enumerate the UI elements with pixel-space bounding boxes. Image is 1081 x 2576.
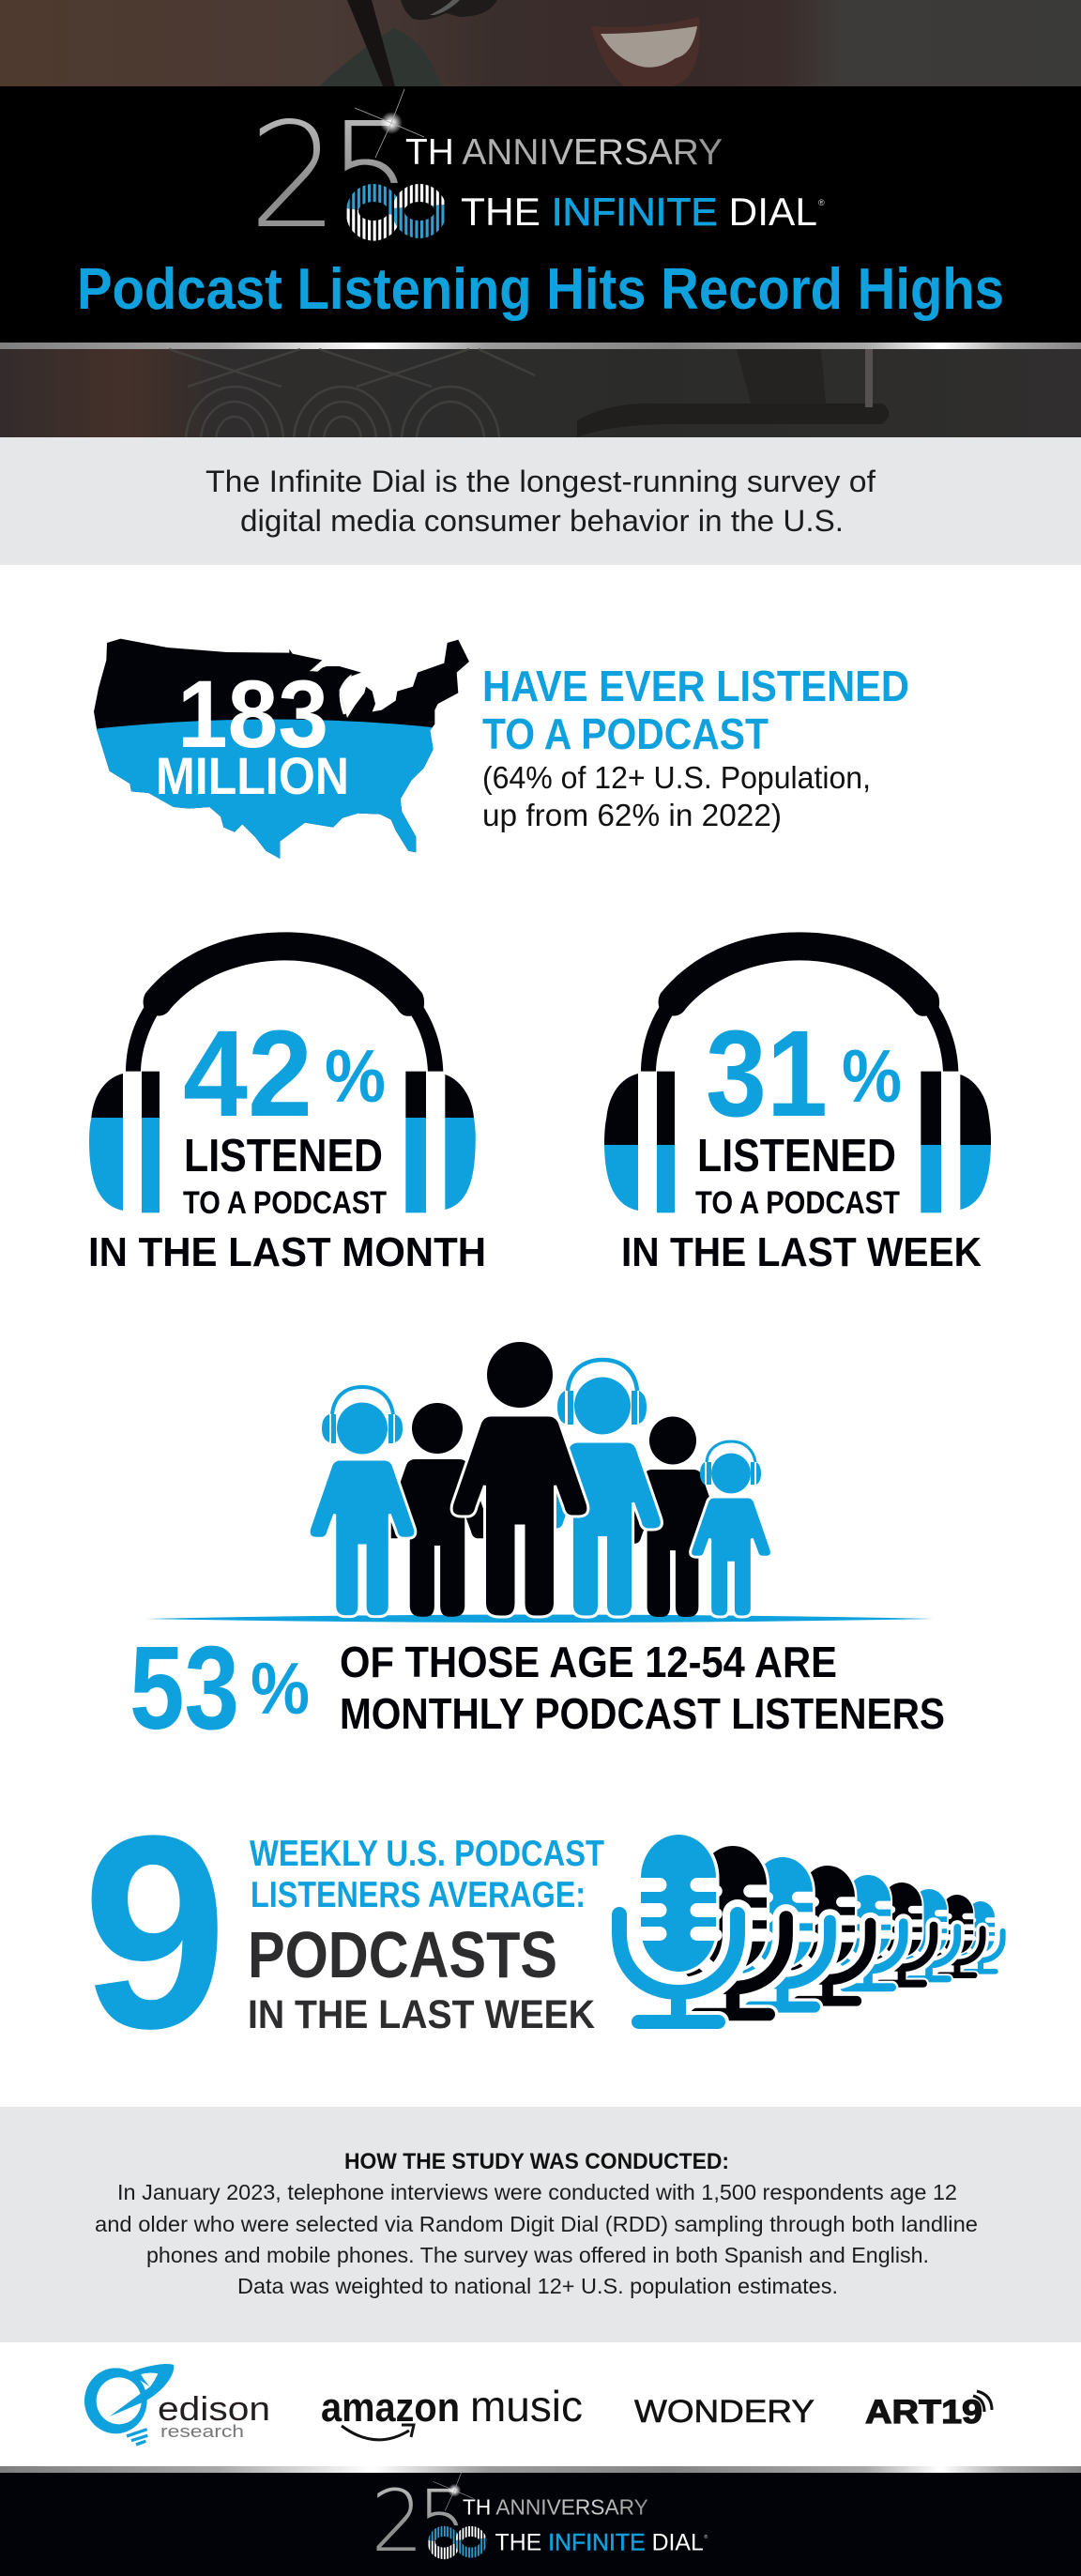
big number: 183 xyxy=(177,661,328,768)
stat heading: HAVE EVER LISTENED xyxy=(482,662,909,710)
anniversary text: TH ANNIVERSARY xyxy=(463,2494,648,2519)
million: MILLION xyxy=(156,746,349,805)
methodology text xyxy=(95,2180,978,2298)
percent figure: 53 xyxy=(129,1622,239,1754)
person: blue left with headphones xyxy=(309,1387,416,1617)
ground line xyxy=(145,1614,934,1623)
logo: art19 xyxy=(865,2391,992,2431)
logo mask xyxy=(334,183,451,249)
stat text: MONTHLY PODCAST LISTENERS xyxy=(340,1689,945,1738)
section: 183 million xyxy=(94,638,908,859)
logo mask xyxy=(421,2525,490,2564)
icon: headphones xyxy=(604,932,991,1212)
us map xyxy=(94,638,469,859)
silver rule xyxy=(0,343,1081,349)
listened: LISTENED xyxy=(184,1131,383,1181)
logo: amazon music xyxy=(321,2382,583,2440)
in the last week: IN THE LAST WEEK xyxy=(621,1229,982,1275)
icon: edison bulb xyxy=(84,2364,174,2445)
person: back left xyxy=(384,1403,491,1617)
stat heading: TO A PODCAST xyxy=(482,709,769,758)
section: 42 percent headphones xyxy=(88,932,486,1275)
to a podcast: TO A PODCAST xyxy=(695,1185,900,1221)
infinite dial wordmark: THE INFINITE DIAL xyxy=(461,190,817,234)
person: blue child with headphones xyxy=(691,1441,771,1617)
percent figure: 42 xyxy=(183,1004,312,1142)
big nine: 9 xyxy=(83,1779,227,2086)
title: Podcast Listening Hits Record Highs xyxy=(77,257,1004,322)
music wordmark: music xyxy=(470,2382,583,2431)
blue lead text: LISTENERS AVERAGE: xyxy=(251,1875,586,1915)
panel: how the study was conducted xyxy=(0,2107,1081,2342)
header band xyxy=(0,86,1081,343)
in the last week: IN THE LAST WEEK xyxy=(248,1992,595,2037)
person: back right xyxy=(623,1417,723,1617)
25th anniversary logo: footer xyxy=(371,2471,708,2571)
person: blue right with headphones xyxy=(543,1360,662,1617)
listened: LISTENED xyxy=(697,1131,896,1181)
photo strip: lower xyxy=(0,349,1081,495)
logo: edison research xyxy=(84,2364,270,2445)
percent sign: % xyxy=(325,1034,386,1118)
numeral 2: 2 xyxy=(371,2473,423,2571)
anniversary text: TH ANNIVERSARY xyxy=(405,132,723,173)
art19 wordmark: ART19 xyxy=(865,2394,982,2431)
methodology heading: HOW THE STUDY WAS CONDUCTED: xyxy=(344,2149,729,2174)
numeral 2: 2 xyxy=(249,91,339,261)
amazon wordmark: amazon xyxy=(321,2385,460,2431)
section: people illustration xyxy=(145,1342,934,1623)
intro text: The Infinite Dial is the longest-running survey of xyxy=(206,465,875,498)
intro text xyxy=(206,465,875,538)
photo strip: top xyxy=(0,0,1081,87)
registered mark: ® xyxy=(818,198,825,207)
icon: smile xyxy=(342,2425,414,2440)
stat text: OF THOSE AGE 12-54 ARE xyxy=(340,1638,837,1686)
icon: infinity bars xyxy=(428,2526,487,2559)
stat: 9 podcasts xyxy=(83,1779,1003,2086)
to a podcast: TO A PODCAST xyxy=(183,1185,387,1221)
numeral 5: 5 xyxy=(417,2473,467,2571)
numeral 5: 5 xyxy=(327,91,414,261)
stat: 53 percent xyxy=(129,1622,945,1754)
icon: headphones xyxy=(89,932,476,1212)
stat heading xyxy=(482,662,909,758)
percent sign: % xyxy=(842,1034,902,1118)
methodology text: Data was weighted to national 12+ U.S. population estimates. xyxy=(237,2274,838,2298)
percent sign: % xyxy=(251,1647,310,1730)
silver rule: footer xyxy=(0,2466,1081,2473)
methodology text: In January 2023, telephone interviews were conducted with 1,500 respondents age 12 xyxy=(117,2180,957,2204)
25th anniversary logo: header xyxy=(249,89,825,261)
stat text xyxy=(340,1638,945,1738)
blue lead text xyxy=(250,1834,604,1915)
panel: intro xyxy=(0,437,1081,565)
icon: infinity bars xyxy=(346,184,447,241)
footer band xyxy=(0,2473,1081,2576)
podcasts: PODCASTS xyxy=(248,1918,557,1991)
section: 31 percent headphones xyxy=(604,932,991,1275)
star sparkle xyxy=(433,2471,474,2510)
icon: row of microphones xyxy=(619,1835,1003,2029)
percent figure: 31 xyxy=(706,1004,828,1142)
blue lead text: WEEKLY U.S. PODCAST xyxy=(250,1834,604,1874)
logo: wondery: WONDERY xyxy=(634,2394,815,2430)
methodology text: phones and mobile phones. The survey was offered in both Spanish and English. xyxy=(146,2243,929,2267)
stat detail: up from 62% in 2022) xyxy=(482,798,782,832)
registered mark: ® xyxy=(704,2534,708,2540)
star sparkle xyxy=(355,89,424,158)
infinite dial wordmark: THE INFINITE DIAL xyxy=(495,2531,704,2556)
stat detail: (64% of 12+ U.S. Population, xyxy=(482,760,871,795)
in the last month: IN THE LAST MONTH xyxy=(88,1229,486,1275)
edison wordmark: edison xyxy=(158,2389,270,2428)
icon: signal arcs xyxy=(973,2391,992,2412)
stat detail xyxy=(482,760,871,832)
person: center adult xyxy=(451,1342,588,1617)
methodology text: and older who were selected via Random Digit Dial (RDD) sampling through both landline xyxy=(95,2212,978,2236)
intro text: digital media consumer behavior in the U.S. xyxy=(240,504,844,538)
research wordmark: research xyxy=(160,2422,244,2441)
